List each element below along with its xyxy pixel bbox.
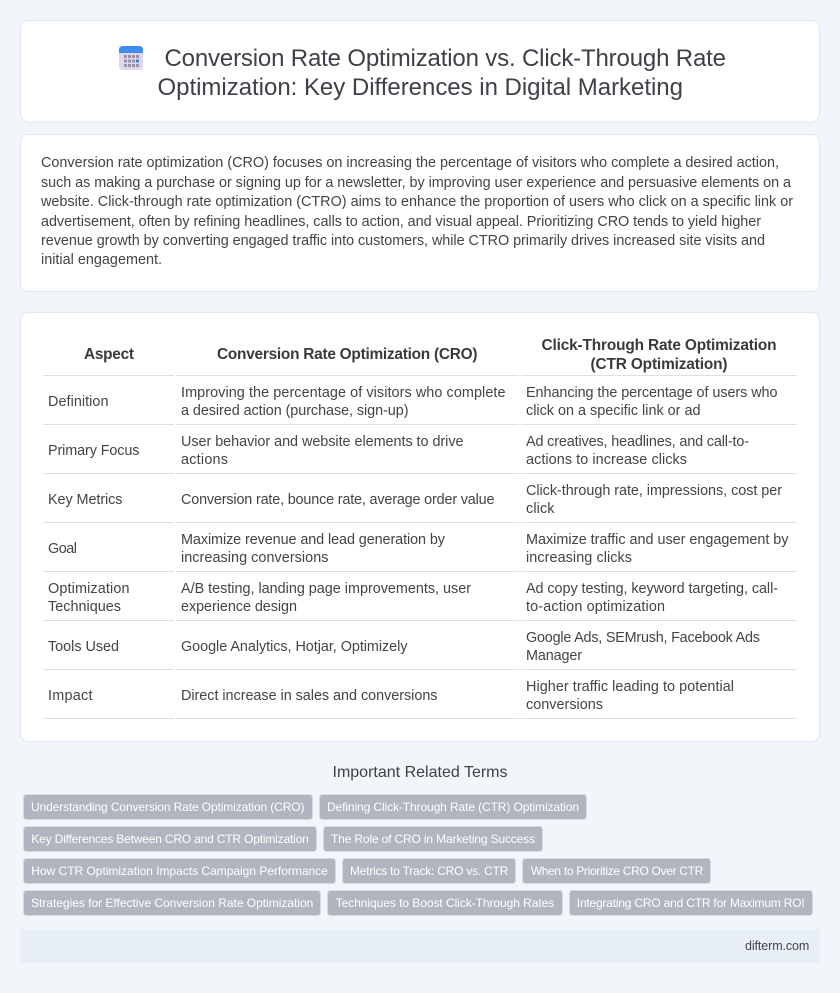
row: definition: Enhancing the percentage of users who	[526, 385, 778, 401]
row: optimization techniques: experience design	[181, 599, 297, 615]
table header: CTR: Click-Through Rate Optimization	[542, 337, 776, 354]
table	[43, 337, 797, 719]
table header: CRO: Conversion Rate Optimization (CRO)	[217, 346, 478, 363]
row: tools used: Manager	[526, 648, 582, 664]
related terms heading: Important Related Terms	[332, 764, 508, 781]
table header: CTR	[542, 337, 776, 373]
footer source: difterm.com	[745, 939, 809, 953]
row: primary focus	[48, 434, 749, 468]
intro card	[20, 134, 820, 292]
header card	[20, 20, 820, 122]
row: impact: conversions	[526, 697, 603, 713]
table header: CTR: (CTR Optimization)	[590, 356, 728, 373]
title: Conversion Rate Optimization vs. Click-Through Rate	[164, 45, 726, 72]
table header: aspect: Aspect	[84, 346, 134, 363]
related term chips: Key Differences Between CRO and CTR Optimization	[31, 832, 309, 846]
row: primary focus: Ad creatives, headlines, and call-to-	[526, 434, 749, 450]
row: goal: increasing conversions	[181, 550, 328, 566]
row: optimization techniques: A/B testing, landing page improvements, user	[181, 581, 471, 597]
related term chips: Strategies for Effective Conversion Rate Optimization	[31, 896, 313, 910]
related term chips: Integrating CRO and CTR for Maximum ROI	[577, 896, 805, 910]
row: optimization techniques: Techniques	[48, 599, 121, 615]
row: key metrics: Click-through rate, impressions, cost per	[526, 483, 782, 499]
row: optimization techniques: Ad copy testing, keyword targeting, call-	[526, 581, 778, 597]
related term chips: Defining Click-Through Rate (CTR) Optimization	[327, 800, 579, 814]
row: impact: Higher traffic leading to potential	[526, 679, 734, 695]
intro text: website. Click-through rate optimization (CTRO) aims to enhance the proportion of users who click on a specific link or	[40, 194, 793, 210]
row: tools used: Google Ads, SEMrush, Facebook Ads	[526, 630, 760, 646]
row: goal: Maximize traffic and user engagement by	[526, 532, 789, 548]
intro text: such as making a purchase or signing up for a newsletter, by improving user experience and persuasive elements on a	[41, 175, 791, 191]
row: definition: Definition	[48, 394, 108, 410]
related term chips: How CTR Optimization Impacts Campaign Performance	[31, 864, 328, 878]
row: primary focus: User behavior and website elements to drive	[181, 434, 464, 450]
row: primary focus: actions	[181, 452, 228, 468]
icon: calendar	[119, 46, 143, 70]
row: definition	[48, 385, 778, 419]
row: goal: Maximize revenue and lead generation by	[181, 532, 446, 548]
row: primary focus: actions to increase clicks	[526, 452, 687, 468]
footer bar	[20, 929, 820, 963]
intro text: initial engagement.	[41, 252, 162, 268]
row: tools used	[48, 630, 760, 664]
row: definition: a desired action (purchase, sign-up)	[181, 403, 408, 419]
row: goal: Goal	[48, 541, 77, 557]
intro text: advertisement, often by refining headlines, calls to action, and visual appeal. Prioritizing CRO tends to yield higher	[41, 214, 761, 230]
row: optimization techniques	[48, 581, 778, 615]
row: impact: Direct increase in sales and conversions	[181, 688, 438, 704]
table card	[20, 312, 820, 742]
row: optimization techniques: to-action optimization	[526, 599, 665, 615]
intro text: revenue growth by converting engaged traffic into customers, while CTRO primarily drives increased site visits and	[41, 233, 765, 249]
row: key metrics	[48, 483, 782, 517]
row: goal: increasing clicks	[526, 550, 632, 566]
row: primary focus: Primary Focus	[48, 443, 140, 459]
row: optimization techniques: Optimization	[48, 581, 130, 597]
related term chips: When to Prioritize CRO Over CTR	[531, 864, 704, 878]
title: Optimization: Key Differences in Digital Marketing	[158, 74, 683, 101]
row: key metrics: Key Metrics	[48, 492, 122, 508]
related term chips: Metrics to Track: CRO vs. CTR	[350, 864, 509, 878]
row: tools used: Tools Used	[48, 639, 119, 655]
row: tools used: Google Analytics, Hotjar, Optimizely	[181, 639, 408, 655]
row: key metrics: click	[526, 501, 555, 517]
row: impact: Impact	[48, 688, 92, 704]
related term chips: Understanding Conversion Rate Optimization (CRO)	[31, 800, 304, 814]
row: impact	[48, 679, 734, 713]
row: definition: click on a specific link or ad	[526, 403, 700, 419]
related term chips: The Role of CRO in Marketing Success	[331, 832, 535, 846]
related term chips	[24, 794, 812, 916]
row: goal	[48, 532, 789, 566]
related term chips: Techniques to Boost Click-Through Rates	[336, 896, 554, 910]
row: definition: Improving the percentage of visitors who complete	[181, 385, 506, 401]
intro text: Conversion rate optimization (CRO) focuses on increasing the percentage of visitors who complete a desired action,	[41, 155, 779, 171]
row: key metrics: Conversion rate, bounce rate, average order value	[181, 492, 494, 508]
title	[158, 45, 726, 101]
intro text	[40, 155, 793, 268]
